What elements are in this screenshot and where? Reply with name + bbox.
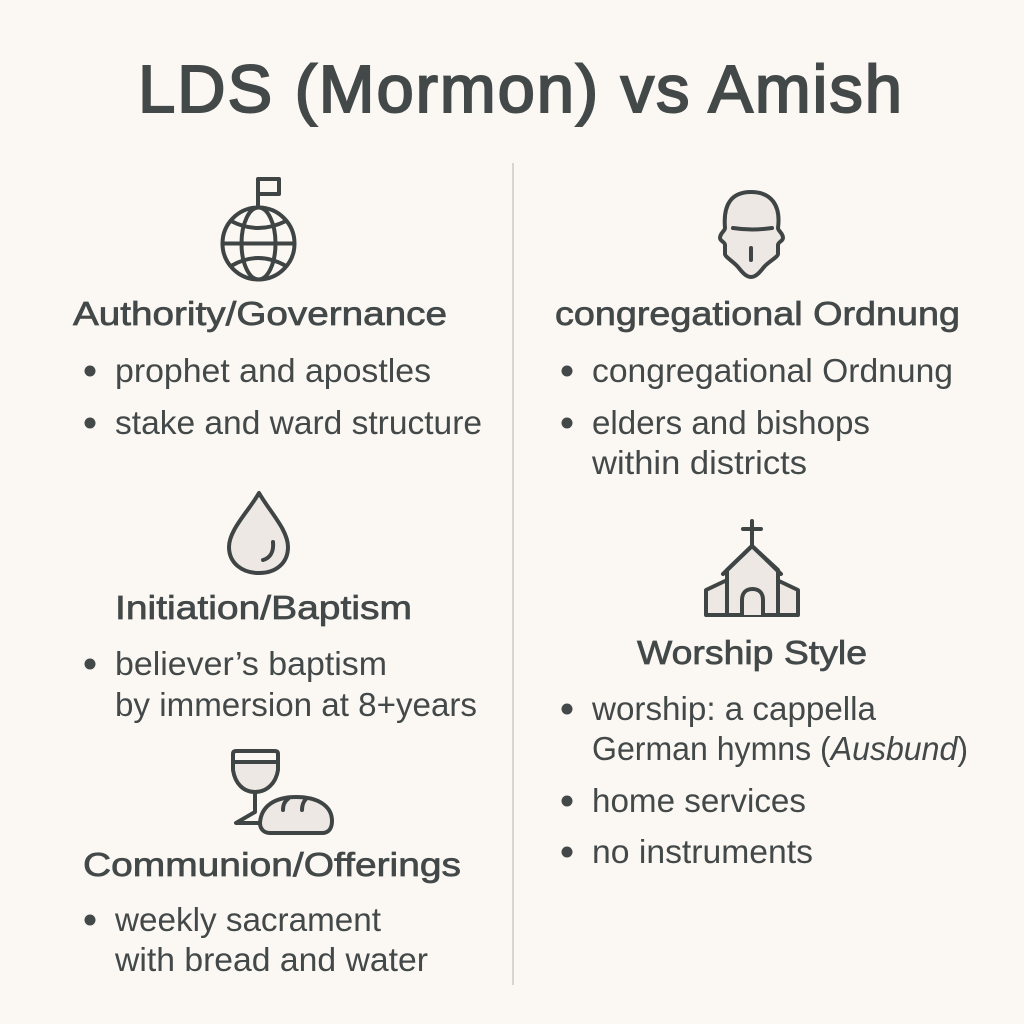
bullet list: authority: stake and ward structure: [115, 404, 482, 441]
bullet list: communion: with bread and water: [114, 941, 428, 978]
bullet list: communion: weekly sacrament: [114, 901, 381, 938]
section: authority/governance: [73, 179, 482, 441]
icon: globe with flag: [222, 179, 294, 280]
icon: head: [720, 192, 783, 277]
bullet list: authority: [84, 352, 482, 441]
heading: congregational Ordnung: congregational Ordnung: [555, 295, 960, 332]
bullet list: authority: prophet and apostles: [115, 352, 431, 389]
heading: Communion/Offerings: Communion/Offerings: [83, 846, 461, 883]
bullet list: governance: [562, 352, 953, 481]
bullet list: worship: German hymns (Ausbund): [592, 730, 968, 767]
panel: LDS column: [73, 179, 482, 978]
section: communion/offerings: [83, 751, 461, 978]
icon: church: [706, 521, 798, 615]
bullet list: worship: home services: [592, 782, 806, 819]
bullet list: worship: worship: a cappella: [591, 690, 877, 727]
bullet list: governance: congregational Ordnung: [592, 352, 953, 389]
title: LDS (Mormon) vs Amish: [138, 52, 902, 127]
bullet list: baptism: believer’s baptism: [115, 645, 387, 682]
bullet list: worship: no instruments: [592, 833, 813, 870]
heading: Authority/Governance: Authority/Governance: [73, 295, 447, 332]
heading: Initiation/Baptism: Initiation/Baptism: [115, 589, 412, 626]
bullet list: baptism: by immersion at 8+years: [115, 686, 477, 723]
section: initiation/baptism: [84, 493, 477, 723]
section: congregational Ordnung: [555, 192, 960, 481]
bullet list: communion: [84, 901, 428, 978]
bullet list: governance: elders and bishops: [592, 404, 870, 441]
section: worship style: [562, 521, 968, 870]
bullet list: baptism: [84, 645, 477, 723]
heading: Worship Style: Worship Style: [637, 634, 867, 671]
panel: Amish column: [555, 192, 968, 870]
bullet list: worship: [562, 690, 968, 870]
icon: water drop: [229, 493, 288, 573]
icon: chalice and bread: [233, 751, 332, 833]
bullet list: governance: within districts: [591, 444, 807, 481]
